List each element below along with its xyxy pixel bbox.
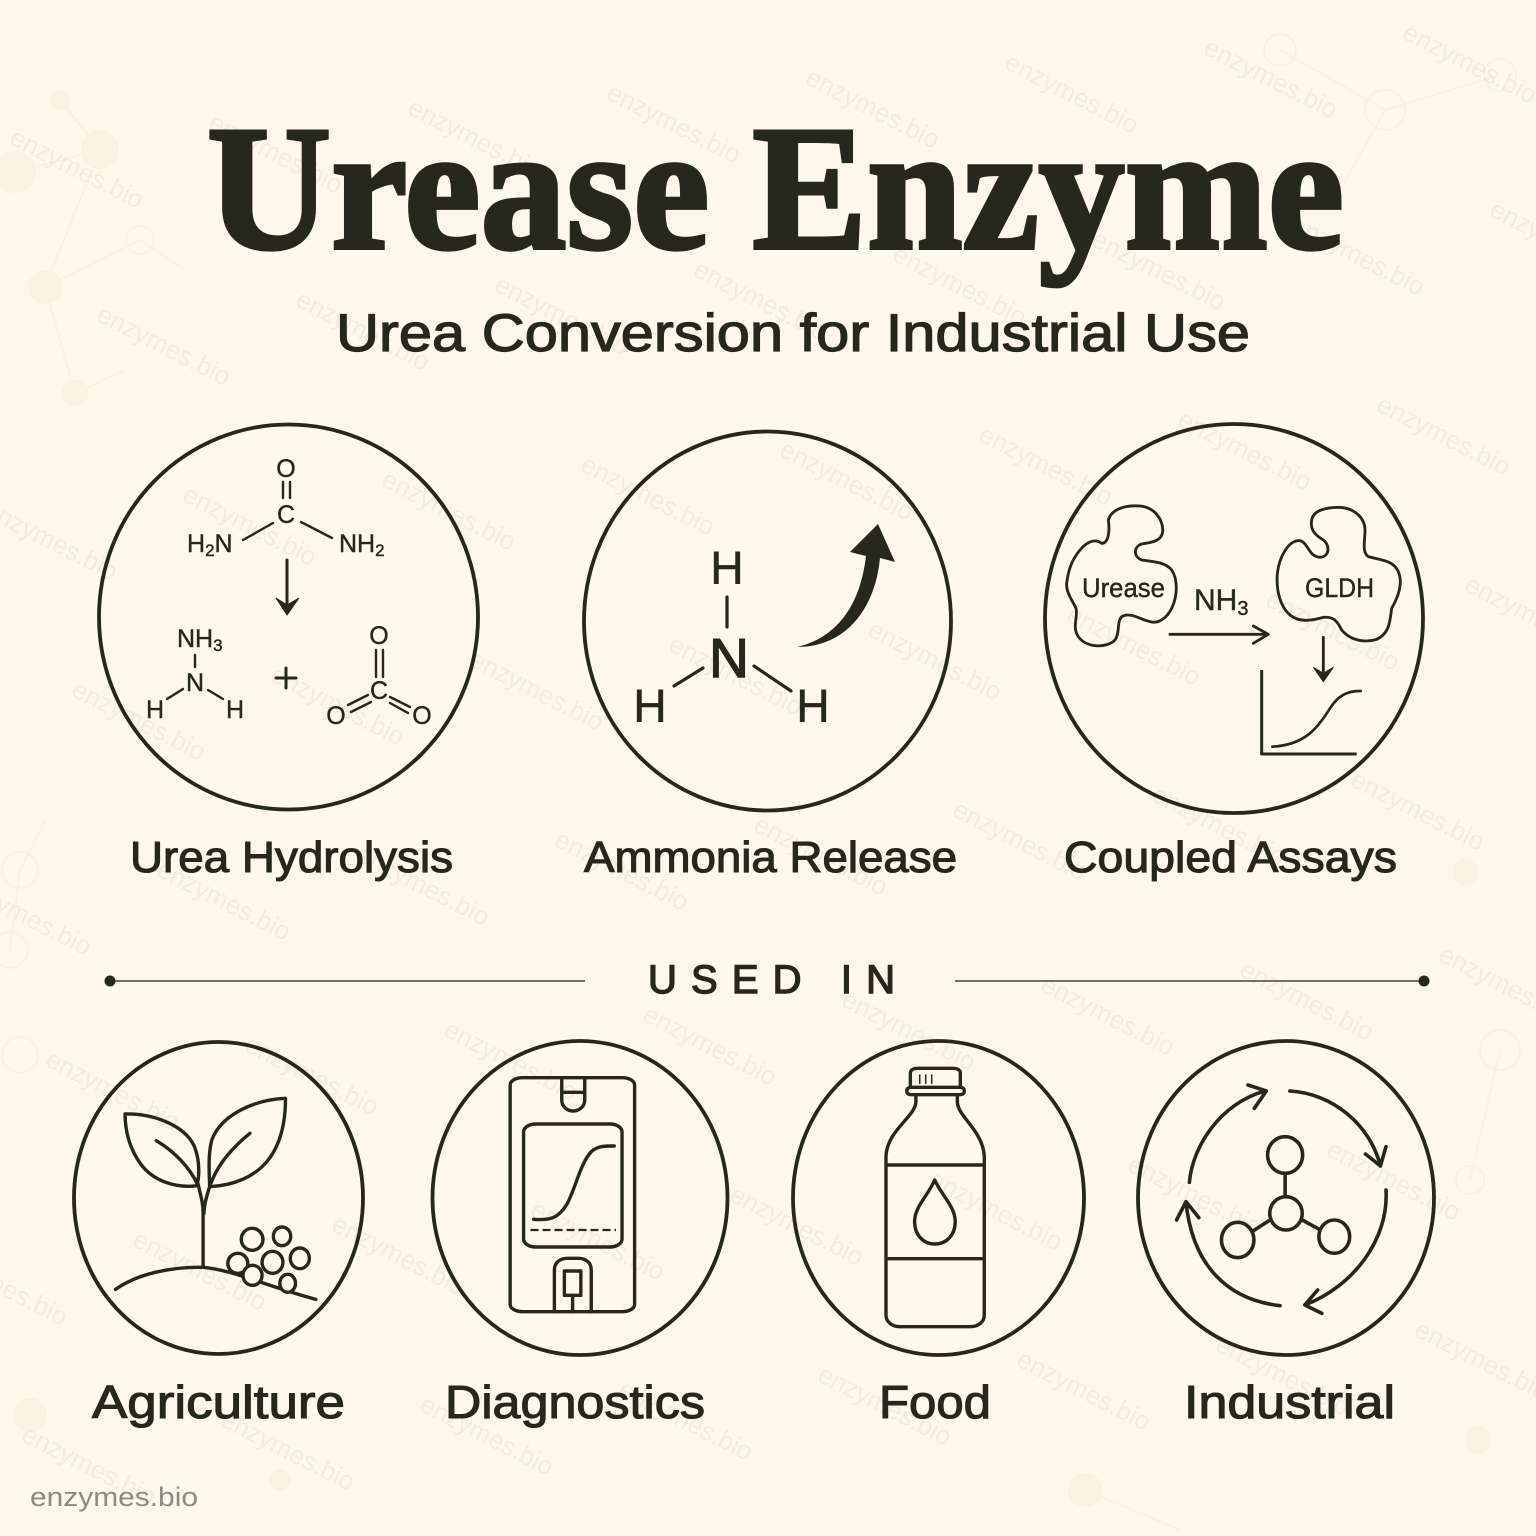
background watermark: enzymes.bio <box>974 419 1118 512</box>
agriculture circle <box>74 1042 363 1354</box>
background watermark: enzymes.bio <box>888 239 1032 332</box>
icon: ammonia molecule: H <box>633 680 667 732</box>
panel: agriculture <box>74 1042 363 1428</box>
background watermark: enzymes.bio <box>1346 764 1490 857</box>
icon: release arrow <box>797 524 895 647</box>
icon: hydrolysis reaction: H <box>187 530 205 558</box>
background watermark: enzymes.bio <box>415 1389 559 1482</box>
background watermark: enzymes.bio <box>837 984 981 1077</box>
icon: hydrolysis reaction: H <box>226 696 244 724</box>
background watermark: enzymes.bio <box>664 629 808 722</box>
background watermark: enzymes.bio <box>1235 954 1379 1047</box>
icon: hydrolysis reaction: 3 <box>213 636 223 655</box>
icon: hydrolysis reaction: O <box>276 455 296 483</box>
background watermark: enzymes.bio <box>614 1374 758 1467</box>
background watermark: enzymes.bio <box>465 644 609 737</box>
panel: industrial <box>1138 1041 1434 1428</box>
icon: hydrolysis reaction: C <box>370 677 388 705</box>
background watermark: enzymes.bio <box>638 999 782 1092</box>
icon: hydrolysis reaction: N <box>215 530 233 558</box>
icon: diagnostic device <box>510 1078 635 1312</box>
divider: used in <box>104 958 1430 1002</box>
background watermark: enzymes.bio <box>351 839 495 932</box>
background watermark: enzymes.bio <box>1012 1344 1156 1437</box>
icon: coupled assay diagram <box>1067 506 1400 754</box>
icon: hydrolysis reaction: O <box>369 622 389 650</box>
background watermark: enzymes.bio <box>327 1209 471 1302</box>
icon: ammonia molecule: N <box>709 627 749 689</box>
footer brand: enzymes.bio <box>30 1482 198 1512</box>
ammonia release circle <box>584 432 951 810</box>
label: Food <box>879 1376 991 1428</box>
food circle <box>793 1041 1084 1355</box>
panel: food <box>793 1041 1084 1428</box>
icon: hydrolysis reaction: 2 <box>205 541 215 560</box>
icon: ammonia molecule <box>633 542 830 732</box>
icon: coupled assay diagram: Urease <box>1082 573 1165 603</box>
coupled assays circle <box>1045 424 1423 813</box>
icon: ammonia molecule: H <box>796 680 830 732</box>
background watermark: enzymes.bio <box>1199 32 1343 125</box>
background watermark: enzymes.bio <box>1322 1134 1466 1227</box>
background watermark: enzymes.bio <box>924 1164 1068 1257</box>
background watermark: enzymes.bio <box>550 824 694 917</box>
icon: coupled assay diagram: 3 <box>1237 598 1248 620</box>
background watermark: enzymes.bio <box>17 1419 161 1512</box>
background watermark: enzymes.bio <box>178 479 322 572</box>
title: Urease Enzyme <box>207 89 1344 287</box>
label: Ammonia Release <box>584 833 957 882</box>
panel: diagnostics <box>432 1041 728 1428</box>
label: Agriculture <box>92 1376 345 1428</box>
background watermark: enzymes.bio <box>813 1359 957 1452</box>
icon: ammonia molecule: H <box>710 542 744 594</box>
background watermark: enzymes.bio <box>602 77 746 170</box>
background watermark: enzymes.bio <box>128 1224 272 1317</box>
industrial circle <box>1138 1041 1434 1355</box>
icon: coupled assay diagram: GLDH <box>1305 573 1374 603</box>
background watermark: enzymes.bio <box>152 854 296 947</box>
heading: USED IN <box>648 958 895 1002</box>
icon: hydrolysis reaction: C <box>277 501 295 529</box>
background watermark: enzymes.bio <box>801 62 945 155</box>
icon: recycling arrows and molecule <box>1177 1085 1386 1313</box>
background watermark: enzymes.bio <box>67 674 211 767</box>
label: Urea Hydrolysis <box>130 833 453 882</box>
background watermark: enzymes.bio <box>41 1044 185 1137</box>
panel: ammonia release <box>584 432 957 882</box>
icon: hydrolysis reaction <box>146 455 432 730</box>
background watermark: enzymes.bio <box>863 614 1007 707</box>
icon: bottle with drop <box>886 1068 984 1327</box>
background watermark: enzymes.bio <box>1286 209 1430 302</box>
background watermark: enzymes.bio <box>1000 47 1144 140</box>
background watermark: enzymes.bio <box>439 1014 583 1107</box>
background watermark: enzymes.bio <box>216 1404 360 1497</box>
background watermark: enzymes.bio <box>5 122 149 215</box>
icon: seedling and seeds <box>116 1098 316 1299</box>
icon: hydrolysis reaction: H <box>146 696 164 724</box>
background watermark: enzymes.bio <box>92 299 236 392</box>
background watermark: enzymes.bio <box>775 434 919 527</box>
background watermark: enzymes.bio <box>490 269 634 362</box>
background watermark: enzymes.bio <box>725 1179 869 1272</box>
icon: coupled assay diagram: NH <box>1194 584 1237 617</box>
background watermark: enzymes.bio <box>526 1194 670 1287</box>
background watermark: enzymes.bio <box>948 794 1092 887</box>
background watermark: enzymes.bio <box>1372 389 1516 482</box>
icon: hydrolysis reaction: O <box>412 702 432 730</box>
background watermark: enzymes.bio <box>1087 224 1231 317</box>
label: Coupled Assays <box>1064 833 1397 882</box>
background watermark: enzymes.bio <box>576 449 720 542</box>
background watermark: enzymes.bio <box>291 284 435 377</box>
background watermark: enzymes.bio <box>749 809 893 902</box>
background watermark: enzymes.bio <box>689 254 833 347</box>
icon: hydrolysis reaction: 2 <box>375 541 385 560</box>
background watermark: enzymes.bio <box>1173 404 1317 497</box>
subtitle: Urea Conversion for Industrial Use <box>336 304 1250 363</box>
background watermark: enzymes.bio <box>1123 1149 1267 1242</box>
icon: hydrolysis reaction: O <box>326 702 346 730</box>
background watermark: enzymes.bio <box>403 92 547 185</box>
label: Industrial <box>1184 1376 1395 1428</box>
icon: hydrolysis reaction: N <box>186 669 204 697</box>
background watermark: enzymes.bio <box>240 1029 384 1122</box>
background watermark: enzymes.bio <box>1211 1329 1355 1422</box>
background watermark: enzymes.bio <box>204 107 348 200</box>
background watermark: enzymes.bio <box>1147 779 1291 872</box>
label: Diagnostics <box>445 1376 705 1428</box>
panel: urea hydrolysis <box>99 424 478 882</box>
background watermark: enzymes.bio <box>266 659 410 752</box>
icon: hydrolysis reaction: NH <box>177 625 213 653</box>
background watermark: enzymes.bio <box>1261 584 1405 677</box>
background watermark: enzymes.bio <box>377 464 521 557</box>
icon: hydrolysis reaction: NH <box>339 530 375 558</box>
urea hydrolysis circle <box>99 424 478 810</box>
panel: coupled assays <box>1045 424 1423 882</box>
background watermark: enzymes.bio <box>1062 599 1206 692</box>
background watermark: enzymes.bio <box>1036 969 1180 1062</box>
diagnostics circle <box>432 1041 728 1355</box>
